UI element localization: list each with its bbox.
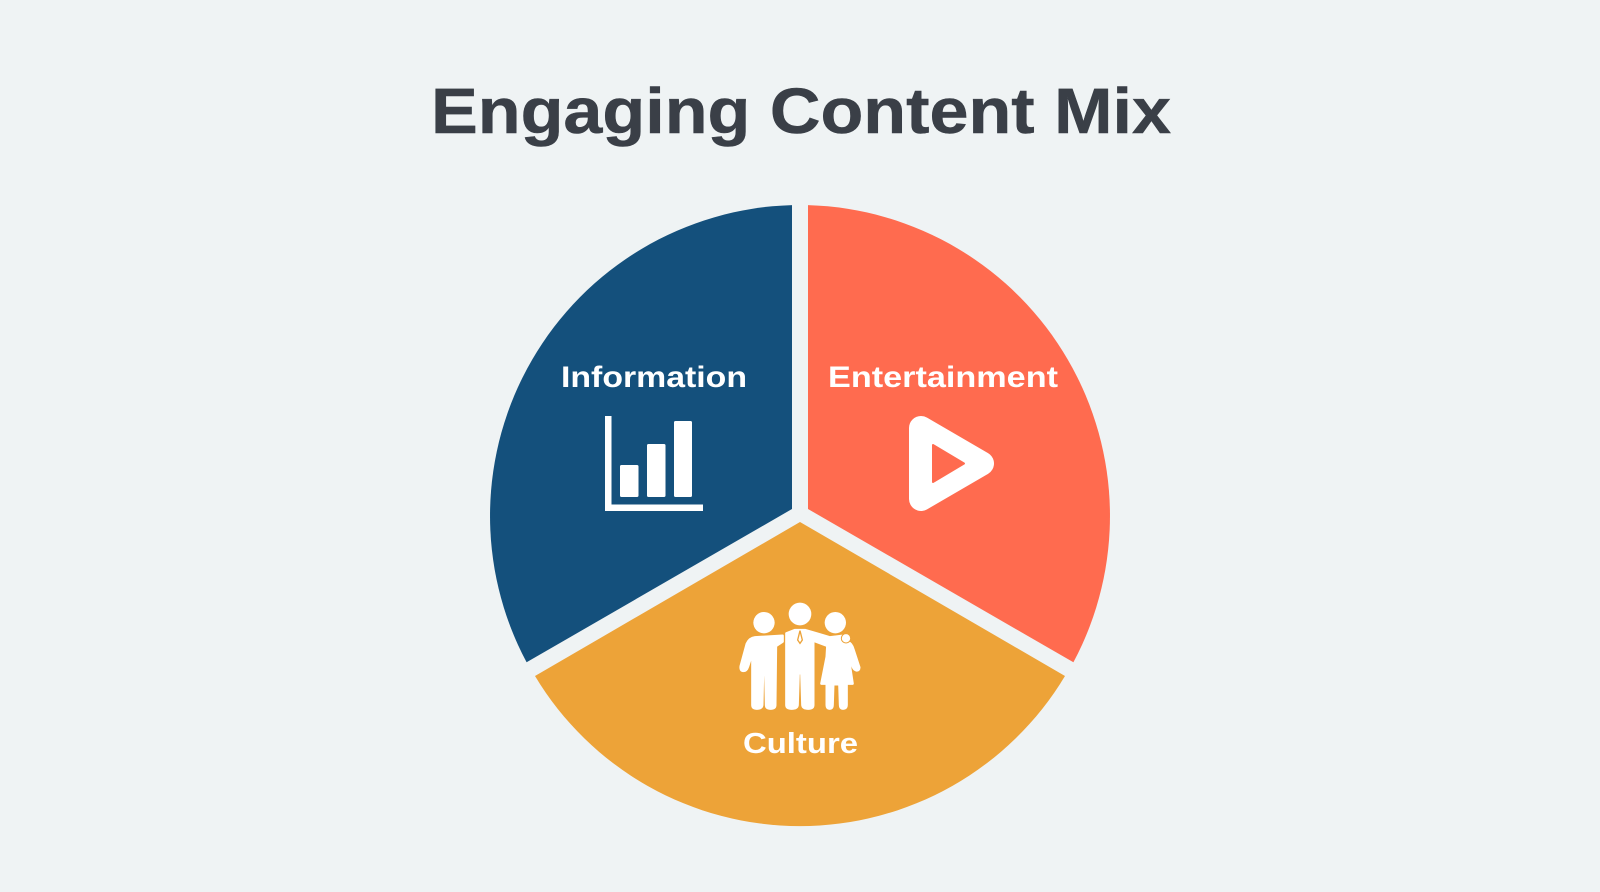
label: information: Information [561, 361, 747, 394]
icon: group of people [741, 603, 859, 709]
panel: culture segment [535, 522, 1065, 826]
panel: entertainment segment [808, 205, 1110, 662]
icon: bar chart [605, 416, 703, 511]
icon: play button [921, 428, 982, 499]
wedge: information [490, 205, 792, 662]
title: Engaging Content Mix [431, 75, 1171, 147]
label: culture: Culture [743, 728, 858, 760]
pie chart [490, 205, 1110, 826]
label: entertainment: Entertainment [828, 361, 1058, 394]
wedge: culture [535, 522, 1065, 826]
wedge: entertainment [808, 205, 1110, 662]
panel: information segment [490, 205, 792, 662]
